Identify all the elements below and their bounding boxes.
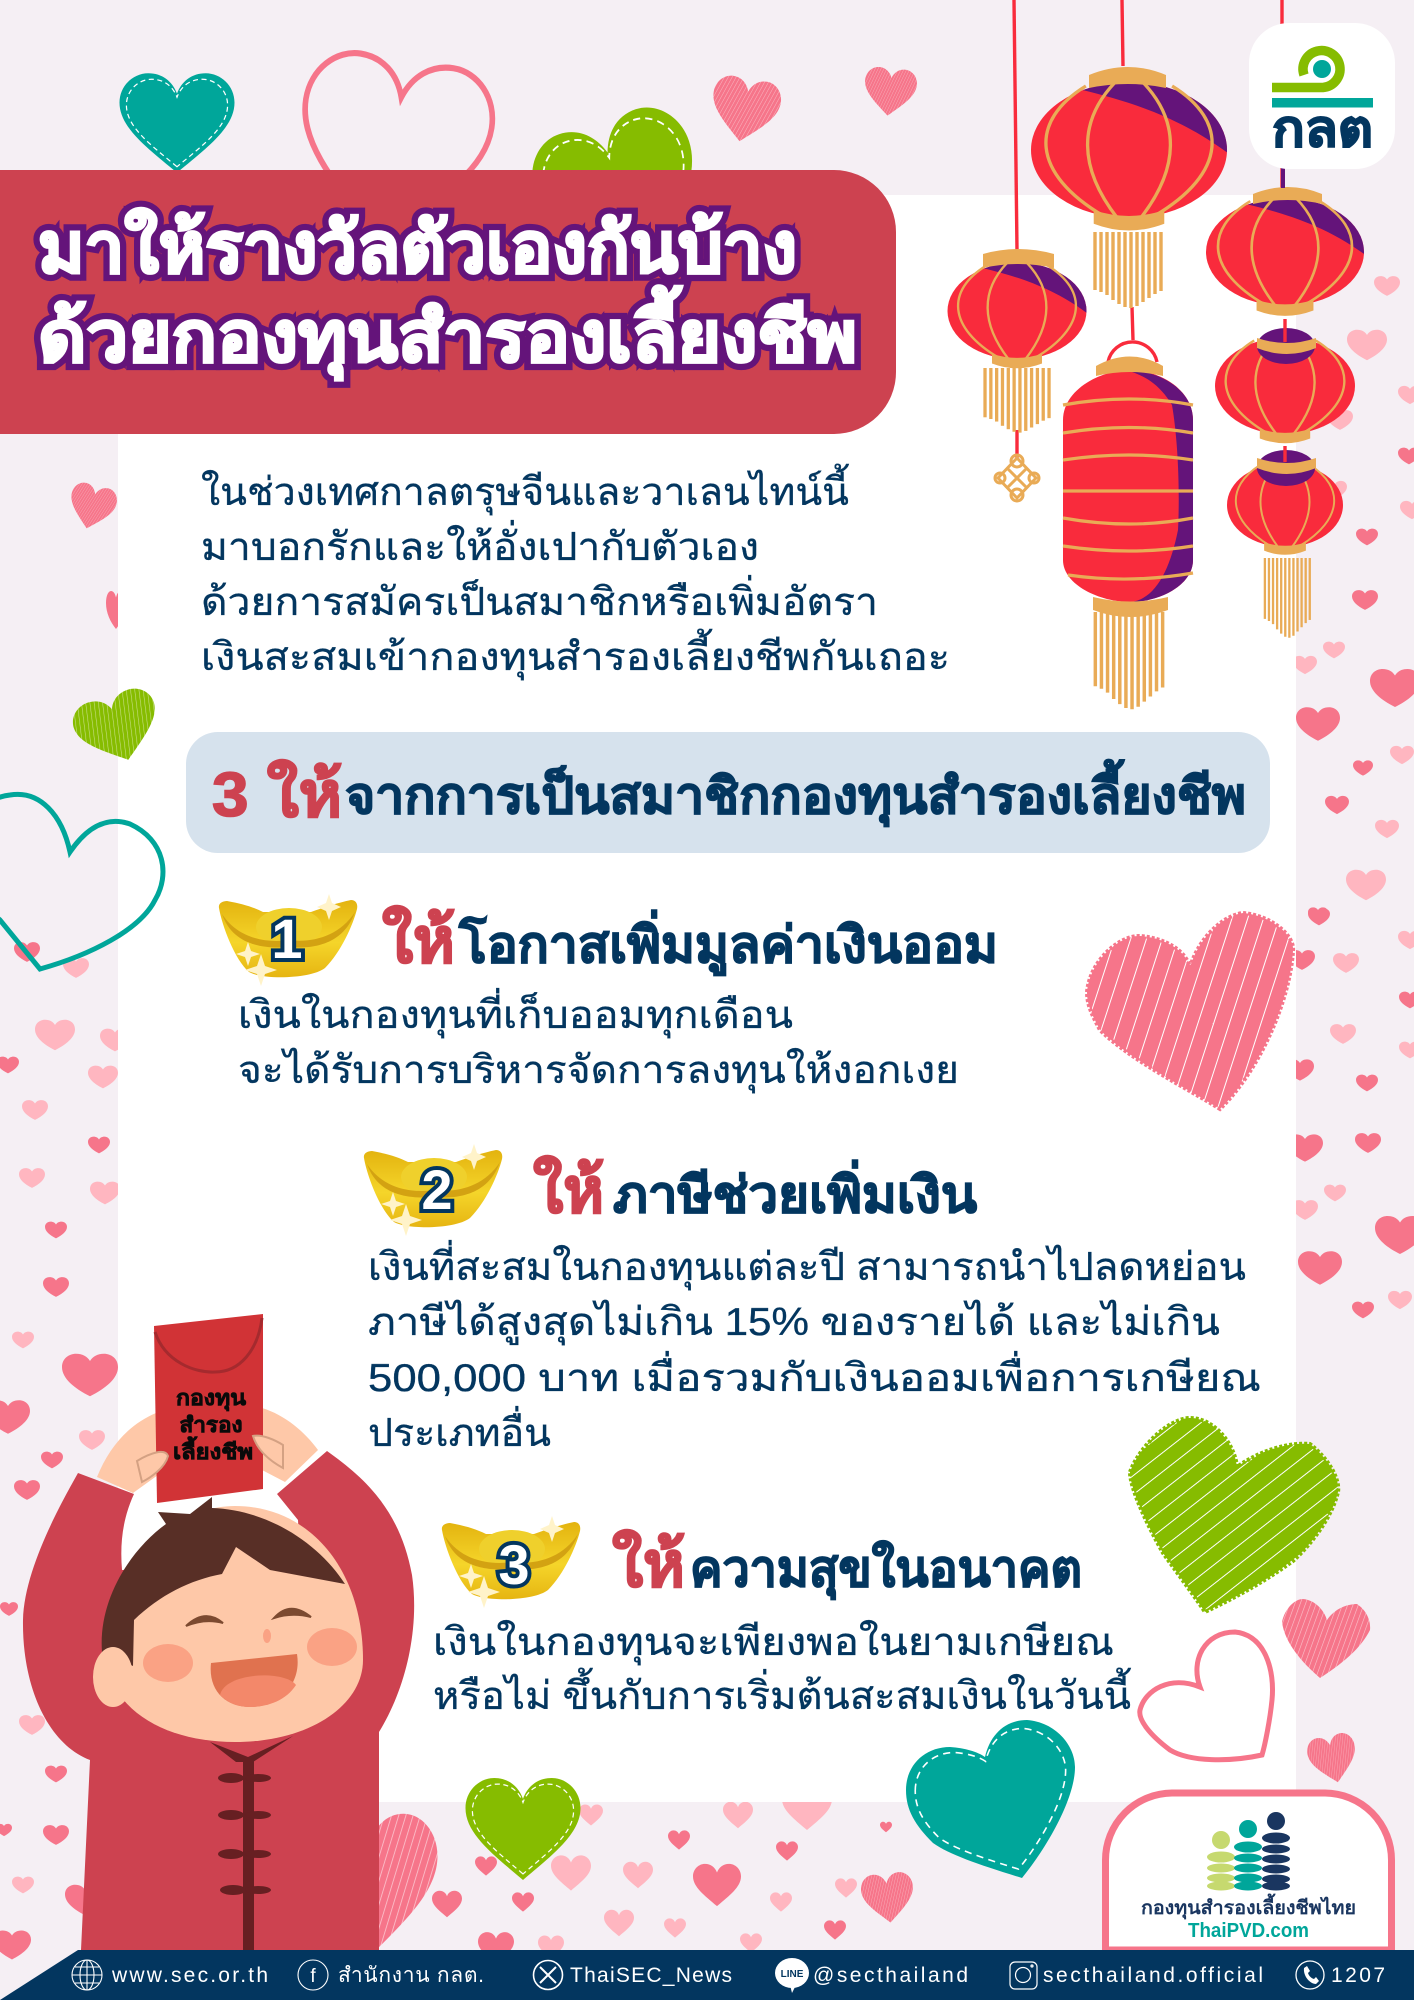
heart: teal stitched bottom [906, 1720, 1075, 1878]
icon: phone [1296, 1961, 1324, 1989]
number 1: 1 [271, 907, 303, 970]
heart: small pink sketch bottom right [1305, 1731, 1361, 1787]
item 1 body: เงินในกองทุนที่เก็บออมทุกเดือน [238, 988, 793, 1039]
red envelope: เลี้ยงชีพ [173, 1436, 253, 1464]
heart: teal brush outline left [0, 794, 163, 969]
heart: left small pink sketch [64, 480, 120, 534]
item 2: ภาษีได้สูงสุดไม่เกิน 15% ของรายได้ และไม่เกิน [368, 1300, 1220, 1346]
heart: green stitched bottom [466, 1778, 580, 1880]
icon: gold ingot 3 [442, 1516, 580, 1608]
item 2: ประเภทอื่น [368, 1406, 551, 1455]
red envelope: กองทุน [176, 1387, 247, 1412]
item 1 [219, 894, 998, 1094]
LINE handle: @secthailand [813, 1964, 968, 1987]
hands [97, 1408, 318, 1493]
logo wordmark: กลต [1272, 101, 1373, 157]
item 3: ความสุขในอนาคต [690, 1540, 1082, 1600]
lantern C [1206, 168, 1372, 316]
title outline layer: มาให้รางวัลตัวเองกันบ้าง [38, 207, 797, 287]
logo: SEC [1249, 23, 1395, 169]
title text: ด้วยกองทุนสำรองเลี้ยงชีพ [38, 285, 857, 381]
logo swirl [1272, 51, 1340, 88]
icon: gold ingot 1 [219, 894, 357, 986]
jacket [23, 1451, 414, 1950]
panel: white content area [118, 195, 1296, 1802]
title banner [0, 170, 896, 434]
lanterns [948, 0, 1372, 709]
heart: green sketch left [68, 683, 168, 773]
lantern E [1227, 446, 1343, 638]
PVD Thai name: กองทุนสำรองเลี้ยงชีพไทย [1141, 1893, 1356, 1920]
item 3: หรือไม่ ขึ้นกับการเริ่มต้นสะสมเงินในวันนี้ [433, 1667, 1132, 1718]
red envelope: สำรอง [180, 1414, 242, 1437]
number 3: 3 [498, 1533, 530, 1596]
lantern A [1031, 67, 1237, 308]
icon: facebook [298, 1960, 328, 1990]
nose [263, 1629, 271, 1643]
item 1 heading: ให้ [382, 905, 455, 976]
website: www.sec.or.th [111, 1964, 268, 1987]
footer bar [0, 1950, 1414, 2000]
heart: top small pink sketch [862, 66, 918, 118]
heart: top pink sketch [706, 73, 784, 147]
heart: pink scribble right [1087, 913, 1293, 1109]
knot ornament [995, 455, 1039, 501]
mouth [211, 1654, 298, 1707]
intro text block [201, 463, 950, 681]
lantern B [948, 249, 1093, 501]
ear [93, 1647, 133, 1707]
title text [38, 207, 857, 381]
item 1: โอกาสเพิ่มมูลค่าเงินออม [458, 910, 998, 976]
background scattered hearts: dark pink [0, 448, 1414, 1964]
heart: pink scribble behind boy [302, 1814, 438, 1956]
item 2 [364, 1144, 1261, 1455]
section banner: 3 ให้ [186, 732, 1270, 853]
jacket placket and frogs [218, 1760, 271, 1950]
item 2 heading: ให้ [533, 1155, 604, 1226]
heart: top pink outline [286, 46, 500, 254]
item 3 body: เงินในกองทุนจะเพียงพอในยามเกษียณ [433, 1620, 1114, 1666]
red envelope [154, 1314, 263, 1503]
heart: top green stitched [520, 97, 724, 297]
icon: instagram [1010, 1962, 1037, 1989]
title text: มาให้รางวัลตัวเองกันบ้าง [38, 207, 797, 287]
facebook name: สำนักงาน กลต. [338, 1964, 484, 1987]
title outline layer: ด้วยกองทุนสำรองเลี้ยงชีพ [38, 285, 857, 381]
item 2 body: เงินที่สะสมในกองทุนแต่ละปี สามารถนำไปลดหย่อน [368, 1240, 1246, 1291]
icon: globe [72, 1960, 102, 1990]
heart: pink sketch right [1282, 1599, 1370, 1678]
icon: LINE: LINE [781, 1969, 804, 1980]
heart: small pink sketch bottom [860, 1871, 916, 1925]
icon: X [534, 1960, 562, 1990]
thumbs [137, 1436, 283, 1482]
item 2: ภาษีช่วยเพิ่มเงิน [613, 1160, 977, 1223]
icon: facebook: f [310, 1966, 316, 1987]
icon: gold ingot 2 [364, 1144, 502, 1236]
heart: pink outline bottom right [1140, 1632, 1273, 1760]
item 3 [433, 1516, 1132, 1718]
intro text block: ในช่วงเทศกาลตรุษจีนและวาเลนไทน์นี้ [201, 463, 850, 516]
banner red label: 3 ให้ [212, 759, 342, 830]
icon: LINE [775, 1958, 809, 1993]
instagram handle: secthailand.official [1043, 1964, 1263, 1987]
item 2: 500,000 บาท เมื่อรวมกับเงินออมเพื่อการเกษียณ [368, 1351, 1261, 1400]
intro text block: ด้วยการสมัครเป็นสมาชิกหรือเพิ่มอัตรา [201, 575, 878, 624]
intro text block: มาบอกรักและให้อั่งเปากับตัวเอง [201, 520, 759, 569]
hair [102, 1497, 345, 1666]
lantern strings [1014, 0, 1282, 458]
number 2: 2 [421, 1158, 453, 1221]
item 1: จะได้รับการบริหารจัดการลงทุนให้งอกเงย [238, 1048, 959, 1094]
eyes [186, 1609, 311, 1626]
cheeks [143, 1644, 193, 1682]
boy holding red envelope [23, 1314, 414, 1950]
lantern D [1215, 319, 1355, 443]
title outline layer [38, 207, 857, 381]
PVD figures icon [1207, 1812, 1290, 1890]
heart: green scribble right [1130, 1418, 1338, 1612]
intro text block: เงินสะสมเข้ากองทุนสำรองเลี้ยงชีพกันเถอะ [201, 628, 950, 681]
panel: ThaiPVD logo box [1106, 1793, 1392, 1950]
item 3 heading: ให้ [612, 1529, 685, 1600]
collar [210, 1736, 293, 1762]
banner heading: จากการเป็นสมาชิกกองทุนสำรองเลี้ยงชีพ [345, 759, 1246, 827]
phone number: 1207 [1331, 1964, 1385, 1987]
face [103, 1506, 363, 1742]
PVD url: ThaiPVD.com [1188, 1920, 1309, 1942]
X handle: ThaiSEC_News [570, 1964, 732, 1987]
lantern F cylinder [1063, 342, 1193, 709]
heart: top teal stitched [120, 73, 234, 173]
